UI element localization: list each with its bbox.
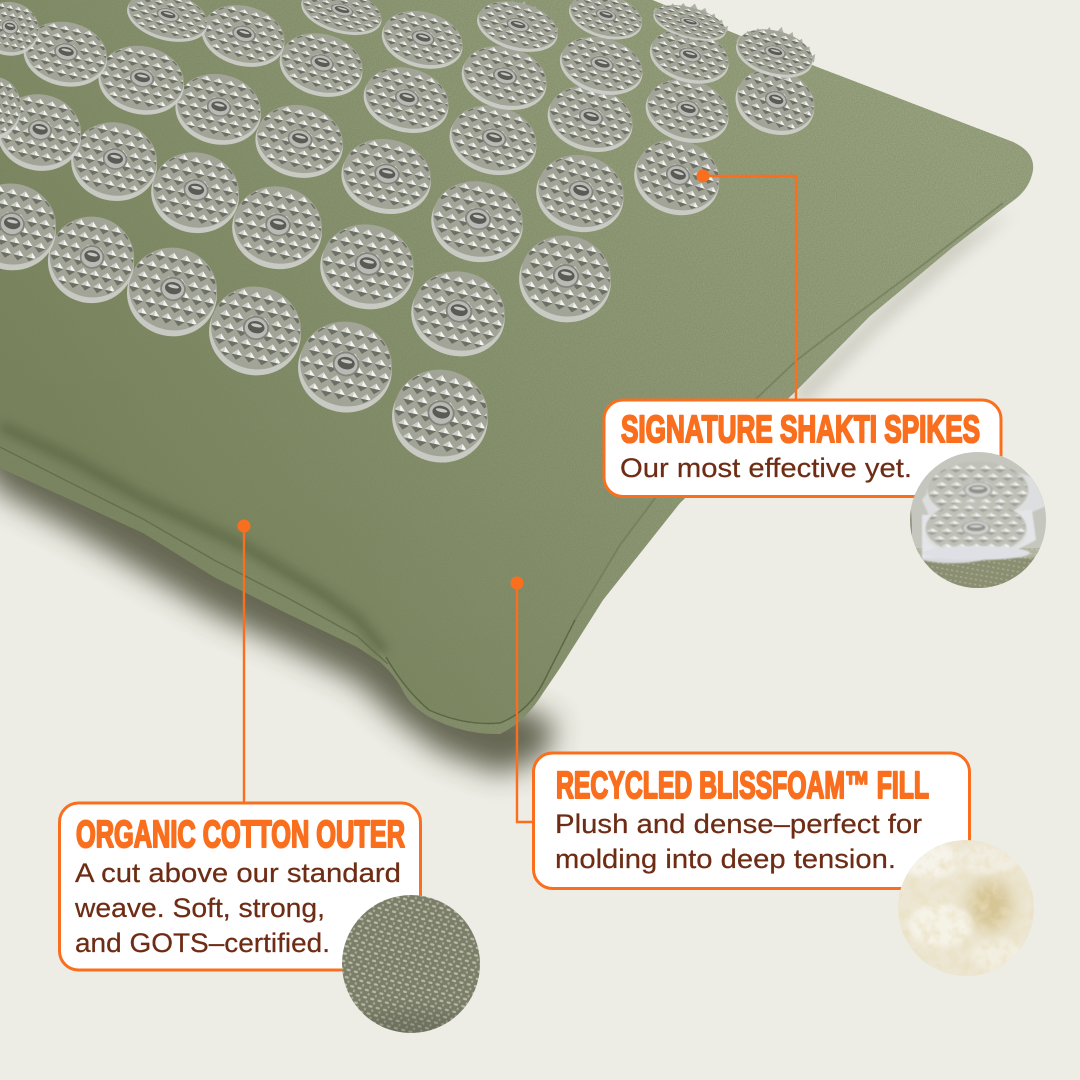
leader line: spikes [696,170,796,400]
text: fill: molding into deep tension. [555,844,896,874]
pillow [0,0,1040,740]
callout: signature shakti spikes [604,400,1001,496]
leader line: cotton [238,520,250,802]
acupressure spike discs [0,0,828,473]
thumbnail: cotton weave [342,895,480,1033]
thumbnail: spike close-up [910,452,1046,588]
thumbnail: foam fill [896,838,1036,978]
pillow top face [0,0,1031,723]
text: cotton: weave. Soft, strong, [74,893,325,923]
pillow outer flange and piping [0,0,1033,734]
text: fill [555,809,922,874]
leader line: fill [510,576,533,822]
pillow shadow [0,212,1012,774]
text: cotton: and GOTS–certified. [75,928,330,958]
text: spikes: Our most effective yet. [620,453,912,483]
callout: recycled blissfoam fill [534,753,970,888]
fabric shading [0,0,1040,740]
heading: cotton: ORGANIC COTTON OUTER [76,814,405,856]
callout: organic cotton outer [60,803,420,970]
text: cotton [74,858,401,958]
text: fill: Plush and dense–perfect for [555,809,922,839]
text: cotton: A cut above our standard [75,858,401,888]
